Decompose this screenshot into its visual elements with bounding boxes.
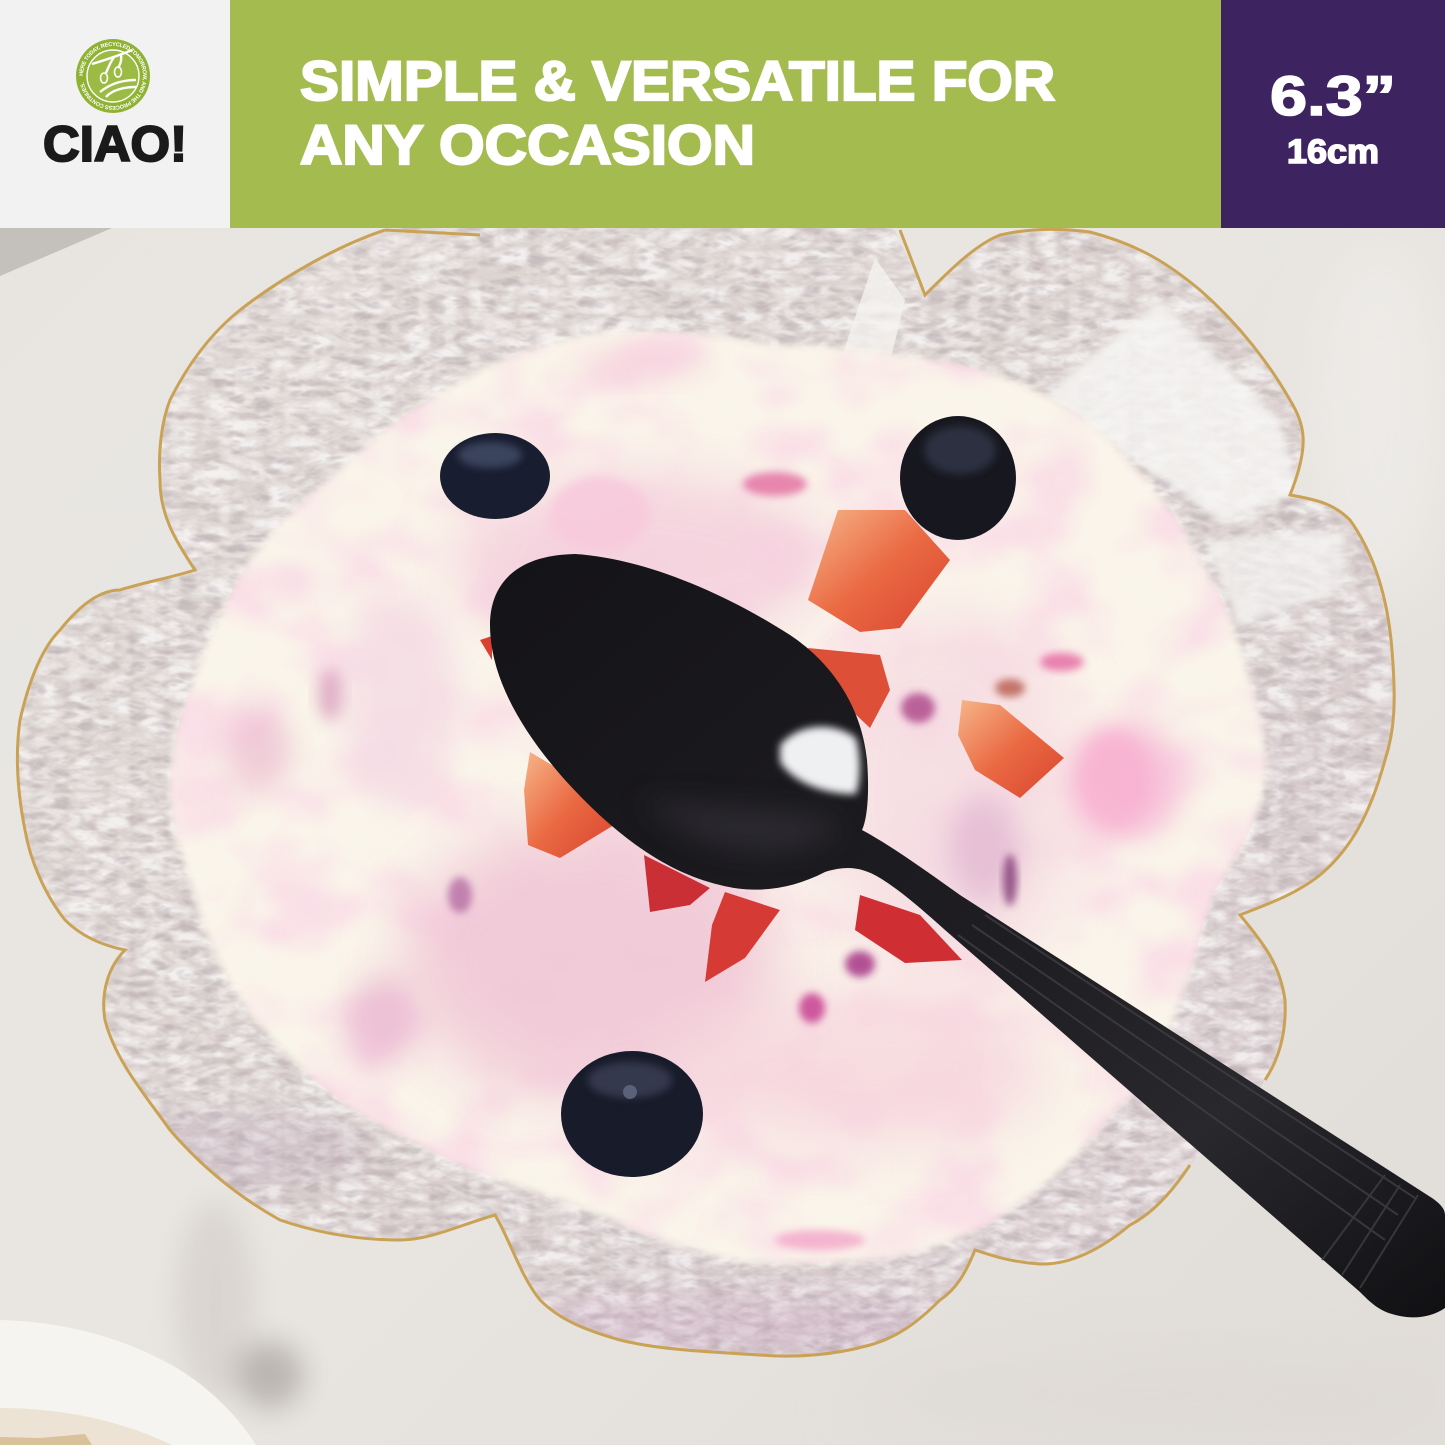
yogurt with pink swirls (150, 320, 1280, 1270)
glass bowl with gold rim (0, 220, 1445, 1370)
size value (1270, 64, 1396, 171)
black spoon (490, 554, 1445, 1317)
blueberries (440, 416, 1016, 1177)
logo panel (0, 0, 230, 228)
header bar (0, 0, 1445, 228)
size panel (1221, 0, 1445, 228)
logo badge: olive branch: HERE TODAY, RECYCLED TOMORROW, AND THE PROCESS CONTINUES. (79, 42, 147, 110)
size value: 6.3” (1270, 64, 1396, 127)
headline text: SIMPLE & VERSATILE FOR (300, 49, 1055, 112)
white side dish, bottom-left (0, 1320, 256, 1445)
logo wordmark: CIAO! (43, 116, 187, 172)
size value: 16cm (1287, 133, 1379, 171)
grey tray in top-left corner (0, 228, 112, 276)
strawberry pieces (480, 510, 1064, 982)
headline text (300, 49, 1055, 176)
headline panel (230, 0, 1221, 228)
headline text: ANY OCCASION (300, 113, 755, 176)
